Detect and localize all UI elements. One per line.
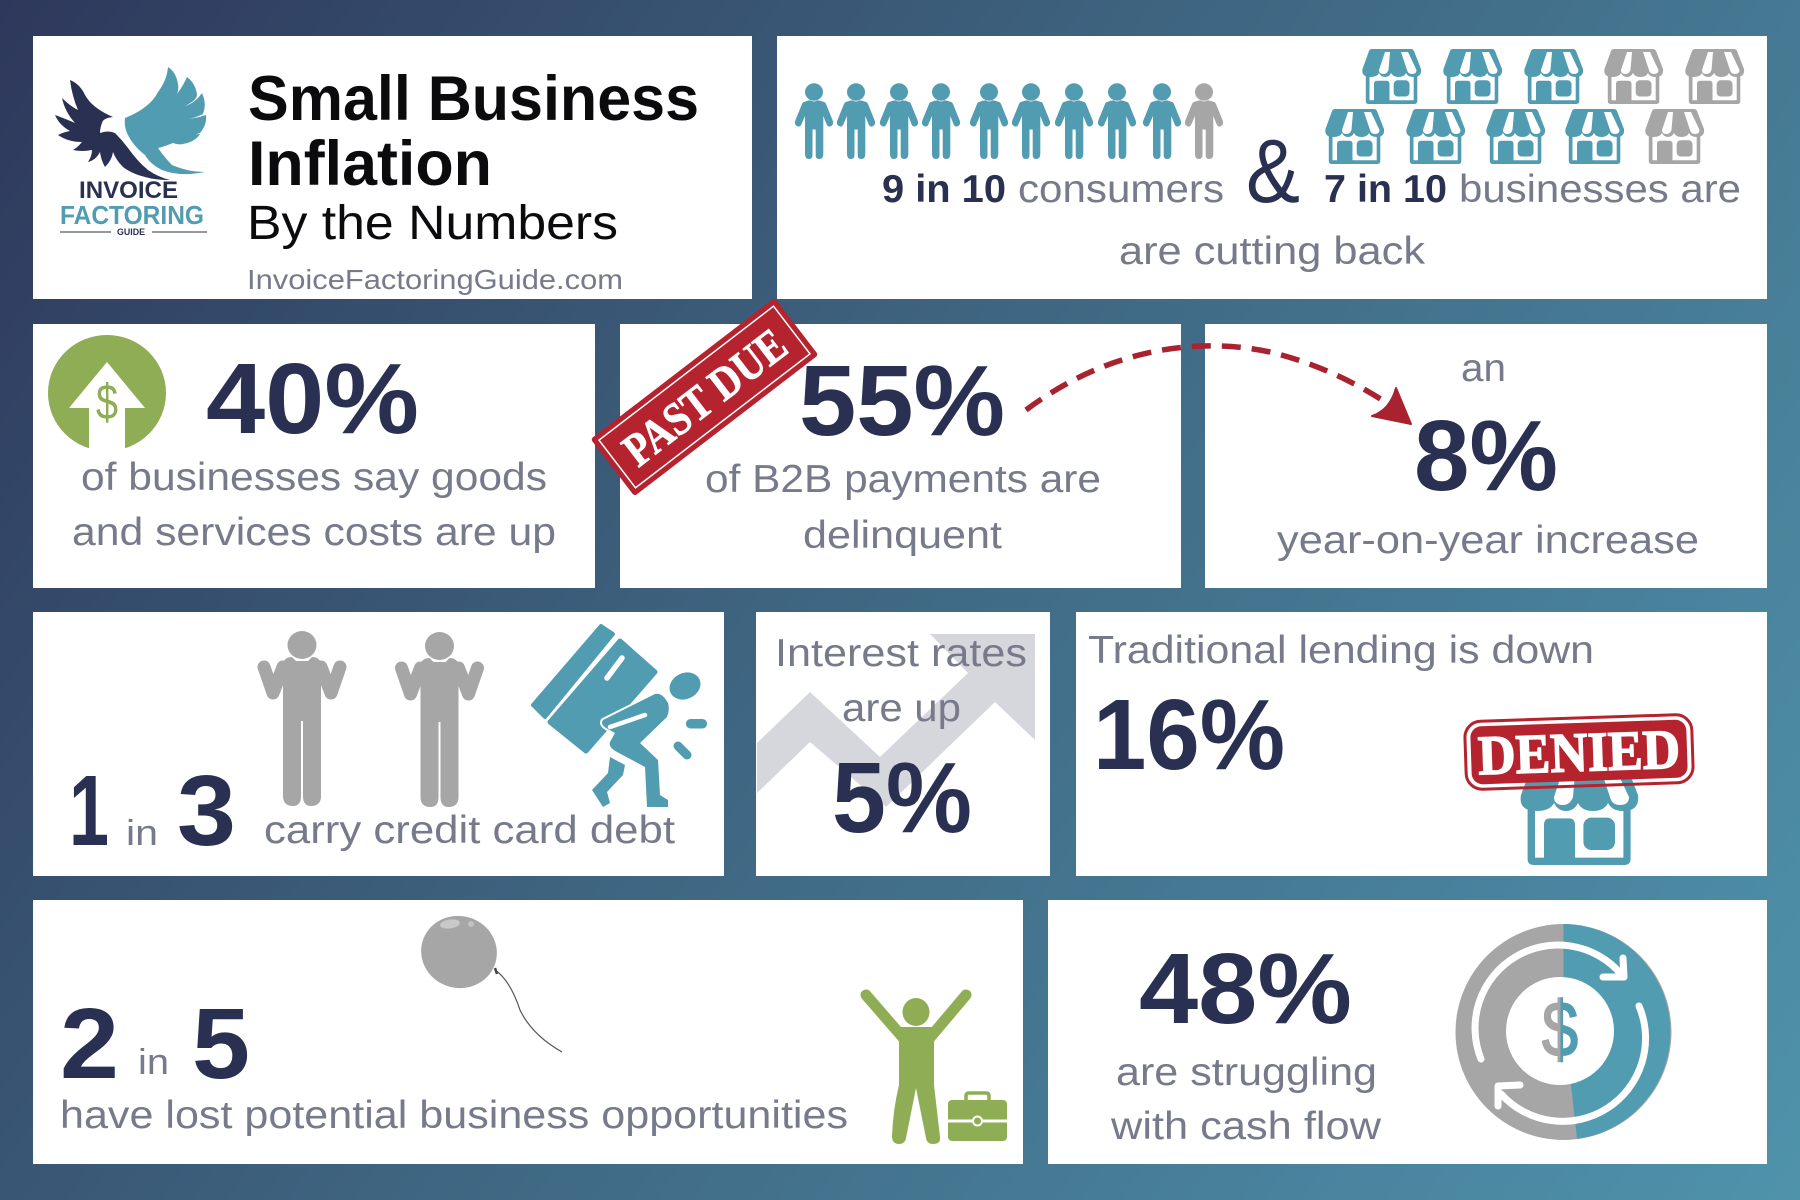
logo word: guide: GUIDE xyxy=(117,227,145,238)
text: of businesses say goods: of businesses say goods xyxy=(81,456,547,499)
panel: 55 percent delinquent xyxy=(591,298,1181,588)
panel: title and logo xyxy=(33,36,752,299)
icon: shrugging person one xyxy=(264,631,340,806)
panel: 8 percent year on year xyxy=(1205,324,1767,588)
text: are struggling: are struggling xyxy=(1116,1051,1377,1094)
text: of B2B payments are: of B2B payments are xyxy=(705,458,1101,501)
icon: invoice factoring guide eagle logo xyxy=(55,67,207,238)
icon: gray balloon floating away xyxy=(413,907,562,1052)
icon: store xyxy=(1521,755,1638,865)
text: have lost potential business opportunities: have lost potential business opportunities xyxy=(60,1094,848,1137)
text: and services costs are up: and services costs are up xyxy=(72,511,556,554)
panel: 40 percent costs up xyxy=(33,324,595,588)
stamp: past due: PAST DUE xyxy=(613,319,797,477)
label: are cutting back: are cutting back xyxy=(1119,230,1426,273)
text: delinquent: delinquent xyxy=(803,514,1002,557)
icon: ten stores, seven teal xyxy=(1325,49,1744,164)
text: in: in xyxy=(126,812,158,853)
icon: green briefcase xyxy=(948,1093,1007,1141)
text: an: an xyxy=(1461,347,1506,390)
text: are up: are up xyxy=(842,687,961,730)
website: InvoiceFactoringGuide.com xyxy=(247,264,623,295)
icon: person carrying heavy credit card xyxy=(533,626,707,807)
subtitle: By the Numbers xyxy=(247,197,618,250)
panel: 1 in 3 carry credit card debt xyxy=(33,612,724,876)
panel: interest rates up 5 percent xyxy=(756,612,1050,876)
stat: 2: 2 xyxy=(60,988,119,1100)
logo word: invoice: INVOICE xyxy=(79,177,178,204)
panel: 2 in 5 lost opportunities xyxy=(33,900,1023,1164)
icon: shrugging person two xyxy=(402,632,478,807)
text: in: in xyxy=(138,1041,169,1082)
stat: 5: 5 xyxy=(192,988,250,1100)
stat: 8 percent: 8% xyxy=(1414,400,1558,512)
text: with cash flow: with cash flow xyxy=(1110,1105,1382,1148)
text: year-on-year increase: year-on-year increase xyxy=(1277,519,1699,562)
stat: 9 in 10: 9 in 10 xyxy=(882,168,1006,211)
panel: consumers and businesses cutting back xyxy=(777,36,1767,299)
panel: traditional lending down 16 percent xyxy=(1076,612,1767,876)
arrow: dashed red arc from 55 percent to 8 percent xyxy=(1026,346,1411,424)
text: traditional lending is down: Traditional lending is down xyxy=(1088,629,1594,672)
ampersand: & xyxy=(1246,122,1300,222)
stat: 3: 3 xyxy=(177,755,236,867)
title line 2: Inflation xyxy=(248,129,492,199)
logo word: factoring: FACTORING xyxy=(60,200,204,230)
panel: 48 percent cash flow xyxy=(1048,900,1767,1164)
stat: 40 percent: 40% xyxy=(206,343,419,455)
icon: green circle with up arrow and dollar: $ xyxy=(96,374,118,430)
text: carry credit card debt: carry credit card debt xyxy=(264,809,675,852)
label: businesses are: businesses are xyxy=(1459,168,1741,211)
icon: green circle with up arrow and dollar xyxy=(48,335,166,453)
icon: cash flow donut with arrows and dollar: $ xyxy=(1542,985,1578,1073)
stat: 16 percent: 16% xyxy=(1093,679,1285,791)
stamp: denied: DENIED xyxy=(1477,719,1681,787)
stat: 48 percent: 48% xyxy=(1139,933,1352,1045)
title line 1: Small Business xyxy=(248,64,699,134)
icon: cash flow donut with arrows and dollar xyxy=(1456,924,1672,1140)
stat: 5 percent: 5% xyxy=(832,742,972,854)
text: interest rates: Interest rates xyxy=(775,632,1027,675)
stat: 55 percent: 55% xyxy=(799,345,1005,457)
icon: green person with raised arms xyxy=(866,995,966,1144)
icon: ten people, nine teal xyxy=(795,83,1223,159)
icon: rising zigzag arrow xyxy=(757,634,1035,807)
stat: 1: 1 xyxy=(69,755,109,867)
stat: 7 in 10: 7 in 10 xyxy=(1324,168,1447,211)
label: consumers: consumers xyxy=(1018,168,1224,211)
